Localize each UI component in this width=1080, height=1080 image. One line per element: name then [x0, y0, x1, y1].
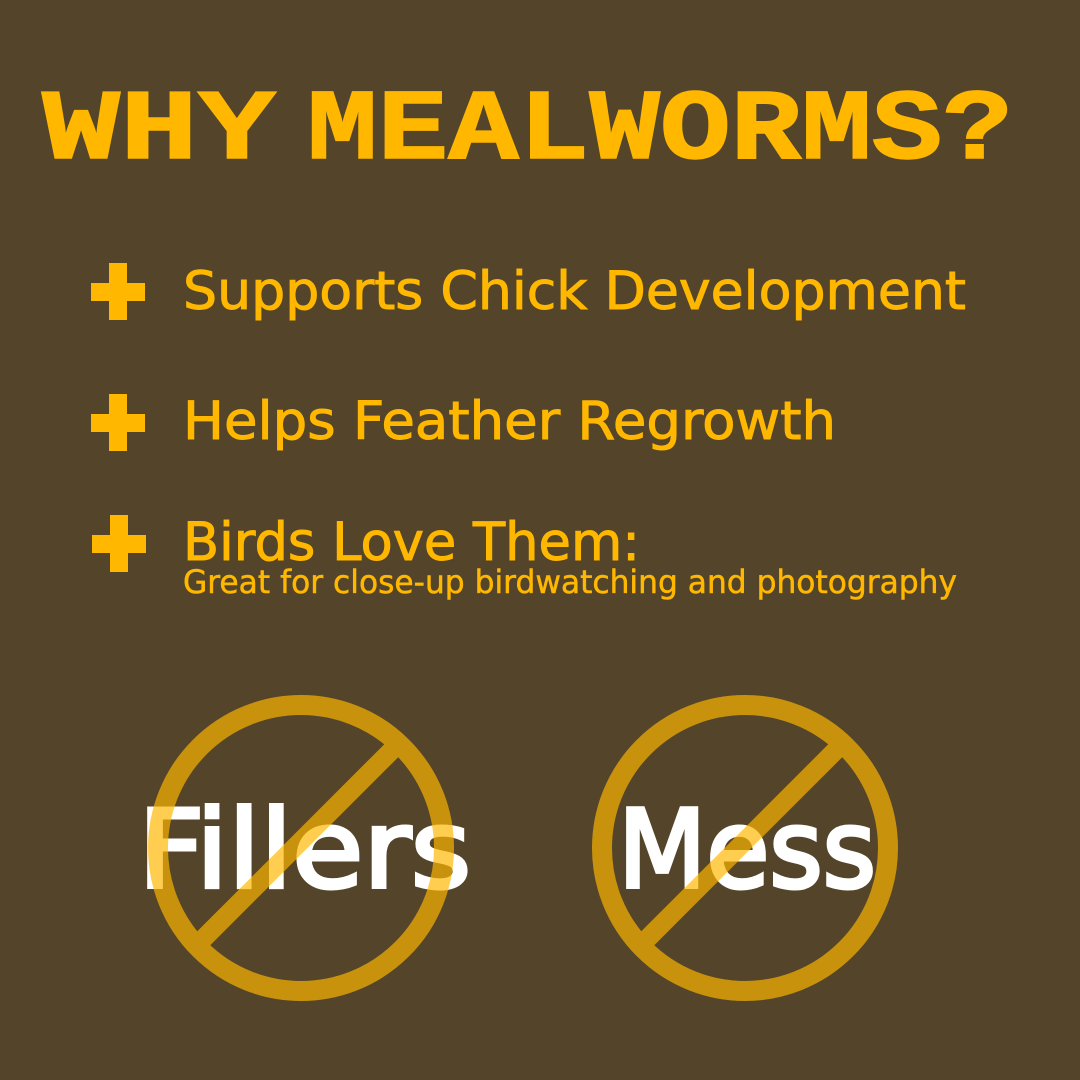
benefit text 2: Helps Feather Regrowth: [183, 391, 836, 452]
benefit: supports chick development: [91, 261, 966, 322]
label: fillers: Fillers: [138, 788, 471, 913]
benefit: helps feather regrowth: [91, 391, 836, 452]
benefit: birds love them: [92, 512, 957, 601]
label: mess: Mess: [618, 788, 876, 913]
icon: plus 1: [91, 263, 145, 320]
icon: prohibition circle left: [158, 705, 444, 991]
no fillers sign: [138, 705, 471, 991]
benefit text 1: Supports Chick Development: [183, 261, 966, 322]
icon: plus 2: [91, 394, 145, 451]
benefit subtext: Great for close-up birdwatching and photography: [183, 563, 957, 601]
title: [42, 76, 1013, 189]
title: MEALWORMS?: [307, 76, 1013, 189]
icon: plus 3: [92, 515, 146, 572]
no mess sign: [602, 705, 888, 991]
benefit text 3: Birds Love Them:: [183, 512, 640, 573]
icon: prohibition circle right: [602, 705, 888, 991]
title: WHY: [42, 76, 276, 189]
